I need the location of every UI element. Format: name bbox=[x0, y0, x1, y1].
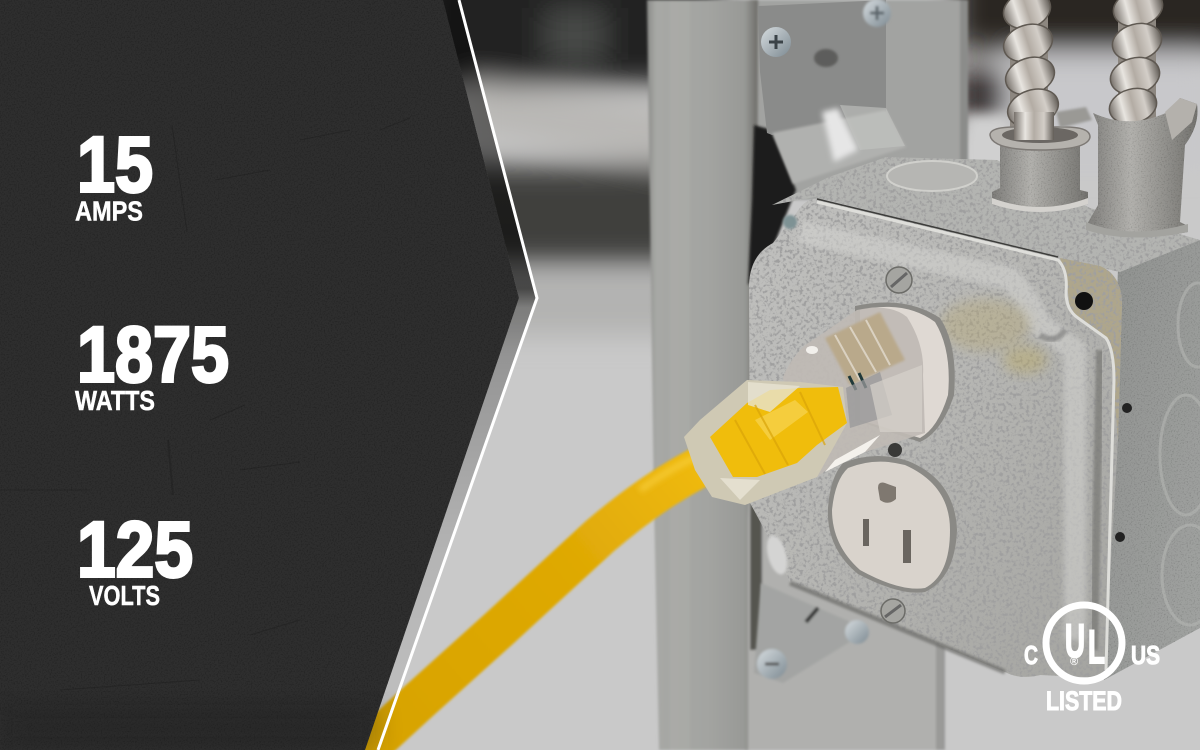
icon: outlet left slot bbox=[863, 519, 869, 546]
icon: lower screw left bbox=[757, 649, 787, 679]
photo: metal conduits with connectors bbox=[990, 0, 1198, 238]
stat: 125 volts bbox=[77, 504, 193, 611]
photo: dark gap beside the box bbox=[748, 125, 796, 285]
logo: UL listed mark bbox=[1024, 605, 1160, 716]
logo word listed: LISTED bbox=[1046, 686, 1122, 716]
icon: outlet ground hole bbox=[878, 483, 896, 503]
logo letter c: C bbox=[1024, 640, 1038, 670]
photo: rear stud bbox=[745, 0, 968, 750]
chevron white outline bbox=[378, 0, 537, 750]
photo: yellow strain relief core bbox=[710, 387, 847, 477]
photo: connector tab between conduits bbox=[1056, 107, 1092, 128]
photo: cover bottom edge shadow bbox=[790, 583, 1005, 672]
icon: lower screw right bbox=[845, 620, 869, 644]
photo: right conduit bbox=[1086, 0, 1198, 238]
icon: cover screw top bbox=[886, 267, 912, 293]
photo: electrical box top bbox=[772, 157, 1200, 272]
number: 15: 15 bbox=[77, 120, 153, 208]
photo: lower outlet bbox=[828, 456, 957, 593]
photo: pressed rim highlights bbox=[800, 199, 1114, 670]
photo: yellow extension cord bbox=[335, 448, 735, 750]
photo: left conduit bbox=[990, 0, 1090, 212]
stat: 1875 watts bbox=[75, 310, 229, 416]
icon: bracket screw left bbox=[761, 27, 791, 57]
unit: volts: VOLTS bbox=[89, 580, 160, 611]
unit: watts: WATTS bbox=[75, 385, 155, 416]
icon: bracket screw right bbox=[863, 0, 891, 27]
photo: steel post bbox=[647, 0, 758, 750]
photo: upper mounting bracket bbox=[758, 0, 906, 184]
photo: electrical box side panel bbox=[1104, 240, 1200, 680]
logo letters us: US bbox=[1131, 640, 1160, 670]
stat: 15 amps bbox=[75, 120, 153, 226]
logo letter U: U bbox=[1065, 614, 1085, 667]
photo: clear strain relief bbox=[684, 380, 847, 505]
panel: dark chevron background bbox=[0, 0, 519, 750]
icon: outlet right slot bbox=[903, 530, 911, 563]
logo letter L: L bbox=[1088, 620, 1105, 673]
number: 1875: 1875 bbox=[77, 310, 229, 398]
photo: lower mounting bracket bbox=[754, 583, 869, 683]
icon: plug wires bbox=[849, 373, 866, 390]
icon: cover screw bottom bbox=[881, 599, 905, 623]
photo: box cover plate bbox=[749, 199, 1122, 678]
photo: clear plug head bbox=[783, 308, 925, 477]
registered mark: ® bbox=[1070, 656, 1078, 668]
logo ring bbox=[1046, 605, 1122, 681]
photo: cover corner ear bbox=[1060, 258, 1122, 440]
photo: clear plug with yellow strain relief bbox=[684, 308, 925, 505]
unit: amps: AMPS bbox=[75, 196, 143, 226]
number: 125: 125 bbox=[77, 504, 193, 594]
panel: translucent offset band behind chevron bbox=[365, 0, 538, 750]
photo: upper outlet behind plug bbox=[855, 302, 955, 442]
